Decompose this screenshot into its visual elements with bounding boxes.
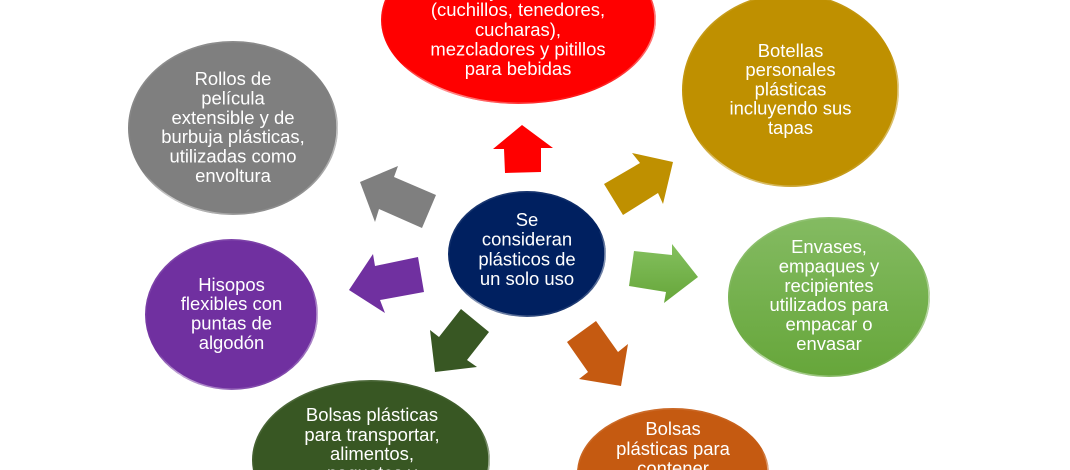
- panel: purple ellipse, cotton swabs: [145, 239, 318, 390]
- panel: green ellipse, containers and packaging: [728, 217, 930, 377]
- panel: red ellipse, cutlery and stirrers: mezcladores y pitillos: [430, 38, 606, 60]
- panel: red ellipse, cutlery and stirrers: para bebidas: [465, 58, 571, 79]
- panel: red ellipse, cutlery and stirrers: cucharas),: [475, 19, 561, 40]
- panel: purple ellipse, cotton swabs: algodón: [199, 332, 264, 353]
- panel: central navy ellipse: [448, 191, 606, 317]
- panel: dark green ellipse, transport bags: [252, 380, 490, 470]
- panel: gold ellipse, personal bottles: [682, 0, 899, 187]
- panel: red ellipse, cutlery and stirrers: [381, 0, 656, 104]
- arrow: gold, upper right: [604, 153, 673, 215]
- panel: grey ellipse, film rolls: extensible y de: [172, 107, 294, 128]
- panel: gold ellipse, personal bottles: personales: [745, 59, 836, 80]
- panel: green ellipse, containers and packaging: envasar: [796, 333, 862, 354]
- panel: gold ellipse, personal bottles: Botellas: [758, 40, 823, 61]
- panel: orange ellipse, containment bags: [577, 408, 769, 470]
- panel: purple ellipse, cotton swabs: puntas de: [191, 312, 272, 334]
- panel: green ellipse, containers and packaging: recipientes: [784, 275, 874, 296]
- arrow: green, right: [629, 244, 698, 303]
- panel: grey ellipse, film rolls: Rollos de: [195, 68, 271, 89]
- panel: orange ellipse, containment bags: plásticas para: [616, 438, 731, 459]
- panel: grey ellipse, film rolls: [128, 41, 338, 215]
- panel: central navy ellipse: consideran: [482, 229, 572, 250]
- panel: purple ellipse, cotton swabs: Hisopos: [198, 274, 265, 295]
- arrow: red, up: [493, 125, 553, 173]
- panel: grey ellipse, film rolls: envoltura: [195, 165, 272, 186]
- panel: gold ellipse, personal bottles: plásticas: [755, 78, 826, 99]
- arrow: purple, left: [349, 254, 424, 313]
- panel: orange ellipse, containment bags: Bolsas: [645, 418, 701, 439]
- panel: green ellipse, containers and packaging: Envases,: [791, 236, 867, 257]
- panel: purple ellipse, cotton swabs: flexibles con: [181, 293, 282, 314]
- panel: green ellipse, containers and packaging: empaques y: [779, 255, 880, 276]
- panel: green ellipse, containers and packaging: utilizados para: [770, 294, 889, 315]
- arrow: grey, upper left: [360, 166, 436, 228]
- panel: central navy ellipse: un solo uso: [480, 268, 574, 289]
- arrow: dark green, lower left: [430, 309, 489, 372]
- panel: dark green ellipse, transport bags: Bolsas plásticas: [306, 404, 438, 425]
- panel: grey ellipse, film rolls: película: [201, 87, 266, 108]
- arrow: orange, lower right: [567, 321, 628, 386]
- panel: gold ellipse, personal bottles: incluyendo sus: [730, 98, 851, 119]
- panel: grey ellipse, film rolls: utilizadas como: [169, 146, 297, 167]
- panel: dark green ellipse, transport bags: para transportar,: [304, 424, 440, 445]
- panel: green ellipse, containers and packaging: empacar o: [785, 314, 873, 335]
- panel: central navy ellipse: plásticos de: [478, 248, 576, 269]
- panel: central navy ellipse: Se: [516, 209, 538, 230]
- panel: dark green ellipse, transport bags: alimentos,: [330, 443, 414, 464]
- panel: gold ellipse, personal bottles: tapas: [768, 117, 813, 138]
- panel: grey ellipse, film rolls: burbuja plásticas,: [161, 126, 305, 147]
